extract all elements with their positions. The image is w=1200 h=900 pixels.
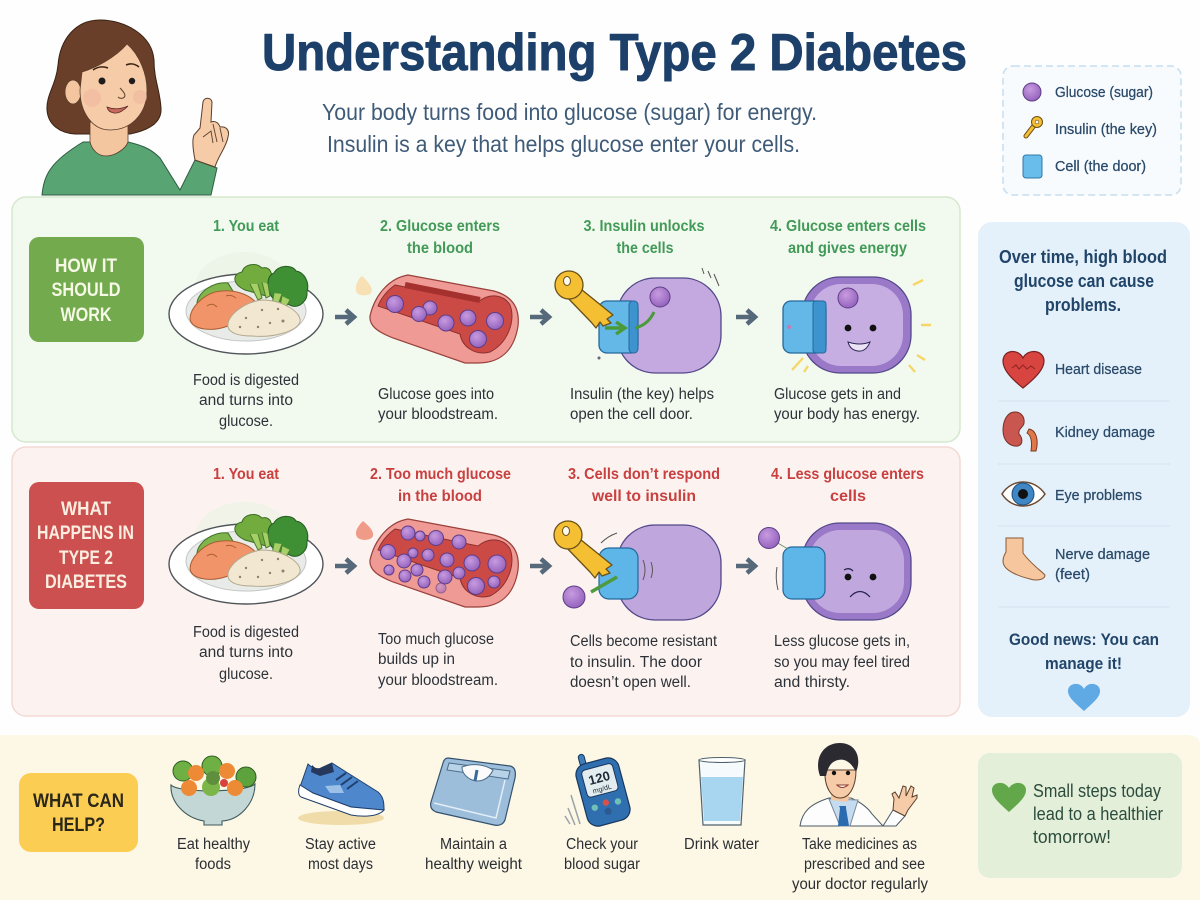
step 1 text: glucose. [219,413,273,430]
item: healthy food [171,756,256,873]
step 2 text: builds up in [378,651,455,668]
item: stay active [298,763,384,873]
item: stay active: Stay active [305,836,376,853]
item: eye problems: Eye problems [1055,487,1142,504]
step 2 heading: 2. Glucose enters [380,218,500,235]
badge: what can help [19,773,138,852]
step 2 text: your bloodstream. [378,672,498,689]
step 4 text: and thirsty. [774,674,850,691]
header illustration: woman pointing [42,20,229,195]
step 1 text: glucose. [219,666,273,683]
badge: how it should work: SHOULD [52,280,120,301]
item: nerve damage: Nerve damage [1055,546,1150,563]
icon: sad cell [758,523,911,620]
problems heading: glucose can cause [1014,271,1154,291]
badge: what happens: HAPPENS IN [37,523,134,544]
legend: cell door: Cell (the door) [1055,159,1146,175]
step 1 text: Food is digested [193,372,299,389]
badge: what happens [29,482,144,609]
item: check blood sugar [564,746,640,873]
item: doctor and medicines: Take medicines as [802,836,917,853]
item: maintain healthy weight [425,758,523,873]
item: check blood sugar: blood sugar [564,856,640,873]
step 2 heading: 2. Too much glucose [370,466,511,483]
good news message: manage it! [1045,654,1122,673]
badge: what happens: TYPE 2 [59,548,113,569]
arrow [530,310,549,324]
item: maintain healthy weight: healthy weight [425,856,523,873]
good news message: Good news: You can [1009,630,1159,649]
icon: blood vessel with excess glucose [356,519,518,607]
step 3 text [570,633,718,691]
step 1 text: Food is digested [193,624,299,641]
item: maintain healthy weight: Maintain a [440,836,507,853]
icon: insulin unlocking cell [555,268,721,373]
step 2 heading: in the blood [398,488,482,505]
legend: glucose: Glucose (sugar) [1055,85,1153,101]
intro text: Insulin is a key that helps glucose enter your cells. [327,131,800,157]
icon: happy cell [783,277,931,373]
step 1 heading: 1. You eat [213,218,280,235]
title: Understanding Type 2 Diabetes [262,24,967,82]
panel: long-term problems [978,222,1190,717]
step 3 text: open the cell door. [570,406,693,423]
item: nerve damage: (feet) [1055,566,1090,583]
step 2 text: your bloodstream. [378,406,498,423]
step 4 text: Glucose gets in and [774,386,901,403]
step 2 text: Too much glucose [378,631,494,648]
legend: insulin key [1026,116,1157,138]
icon: blood vessel [356,275,518,363]
step 4 heading: 4. Glucose enters cells [770,218,926,235]
badge: how it should work: HOW IT [55,256,117,277]
step 4 text: your body has energy. [774,406,920,423]
item: heart disease [1003,352,1142,388]
step 3 text [570,386,714,423]
step 1 text [193,624,299,683]
step 3 heading [568,466,720,505]
step 4 heading: 4. Less glucose enters [771,466,924,483]
step 4 heading [770,218,926,257]
item: kidney damage [1003,412,1155,451]
step 4 heading [771,466,924,505]
step 4 heading: and gives energy [788,240,907,257]
arrow [530,559,549,573]
step 4 text [774,633,910,691]
icon: plate of food [169,252,323,354]
badge: how it should work: WORK [60,305,112,326]
step 3 text: Insulin (the key) helps [570,386,714,403]
badge: what can help: HELP? [52,815,105,836]
step 3 heading [584,218,705,257]
badge: what can help: WHAT CAN [33,791,124,812]
arrow [335,310,354,324]
step 3 heading: the cells [616,240,674,257]
icon: plate of food [169,502,323,604]
item: drink water [684,758,759,853]
panel: how it should work [12,197,960,442]
problems heading: problems. [1045,295,1121,315]
problems heading [999,247,1167,315]
arrow [736,310,755,324]
callout: small steps: tomorrow! [1033,827,1111,847]
step 1 text [193,372,299,430]
step 1 heading: 1. You eat [213,466,280,483]
step 2 heading [380,218,500,257]
item: healthy food: Eat healthy [177,836,250,853]
legend: glucose [1023,83,1153,101]
panel: what happens in type 2 diabetes [12,447,960,716]
legend: cell door [1023,155,1146,178]
legend: insulin key: Insulin (the key) [1055,122,1157,138]
item: heart disease: Heart disease [1055,361,1142,378]
step 4 text: so you may feel tired [774,654,910,671]
item: healthy food: foods [195,856,231,873]
intro text: Your body turns food into glucose (sugar) for energy. [322,99,817,125]
arrow [736,559,755,573]
step 3 text: to insulin. The door [570,654,702,671]
step 2 text: Glucose goes into [378,386,494,403]
step 2 heading [370,466,511,505]
step 3 heading: well to insulin [591,488,696,505]
step 4 text [774,386,920,423]
callout: small steps [978,753,1182,878]
arrow [335,559,354,573]
step 1 text: and turns into [199,392,293,409]
callout: small steps: Small steps today [1033,781,1161,801]
step 3 text: doesn’t open well. [570,674,691,691]
panel: what can help [0,735,1200,900]
item: check blood sugar: Check your [566,836,638,853]
item: stay active: most days [308,856,373,873]
item: drink water: Drink water [684,836,759,853]
item: nerve damage [1003,538,1150,583]
step 2 text [378,631,498,689]
item: check blood sugar: 120 [587,768,612,788]
step 3 heading: 3. Cells don’t respond [568,466,720,483]
step 4 heading: cells [830,488,866,505]
callout: small steps: lead to a healthier [1033,804,1163,824]
badge: how it should work [29,237,144,342]
item: doctor and medicines: prescribed and see [804,856,925,873]
icon: blue heart [1068,684,1100,711]
step 3 heading: 3. Insulin unlocks [584,218,705,235]
step 4 text: Less glucose gets in, [774,633,910,650]
legend panel [1003,66,1181,195]
step 2 text [378,386,498,423]
item: check blood sugar: mg/dL [592,784,613,795]
intro text [322,99,817,157]
item: doctor and medicines [792,743,928,893]
icon: resistant cell with key [554,521,721,620]
badge: what happens: WHAT [61,499,111,520]
step 1 text: and turns into [199,644,293,661]
good news message [1009,630,1159,673]
item: eye problems [1002,482,1142,506]
step 3 text: Cells become resistant [570,633,718,650]
step 2 heading: the blood [407,240,473,257]
item: kidney damage: Kidney damage [1055,424,1155,441]
badge: what happens: DIABETES [45,572,127,593]
item: doctor and medicines: your doctor regularly [792,876,928,893]
problems heading: Over time, high blood [999,247,1167,267]
